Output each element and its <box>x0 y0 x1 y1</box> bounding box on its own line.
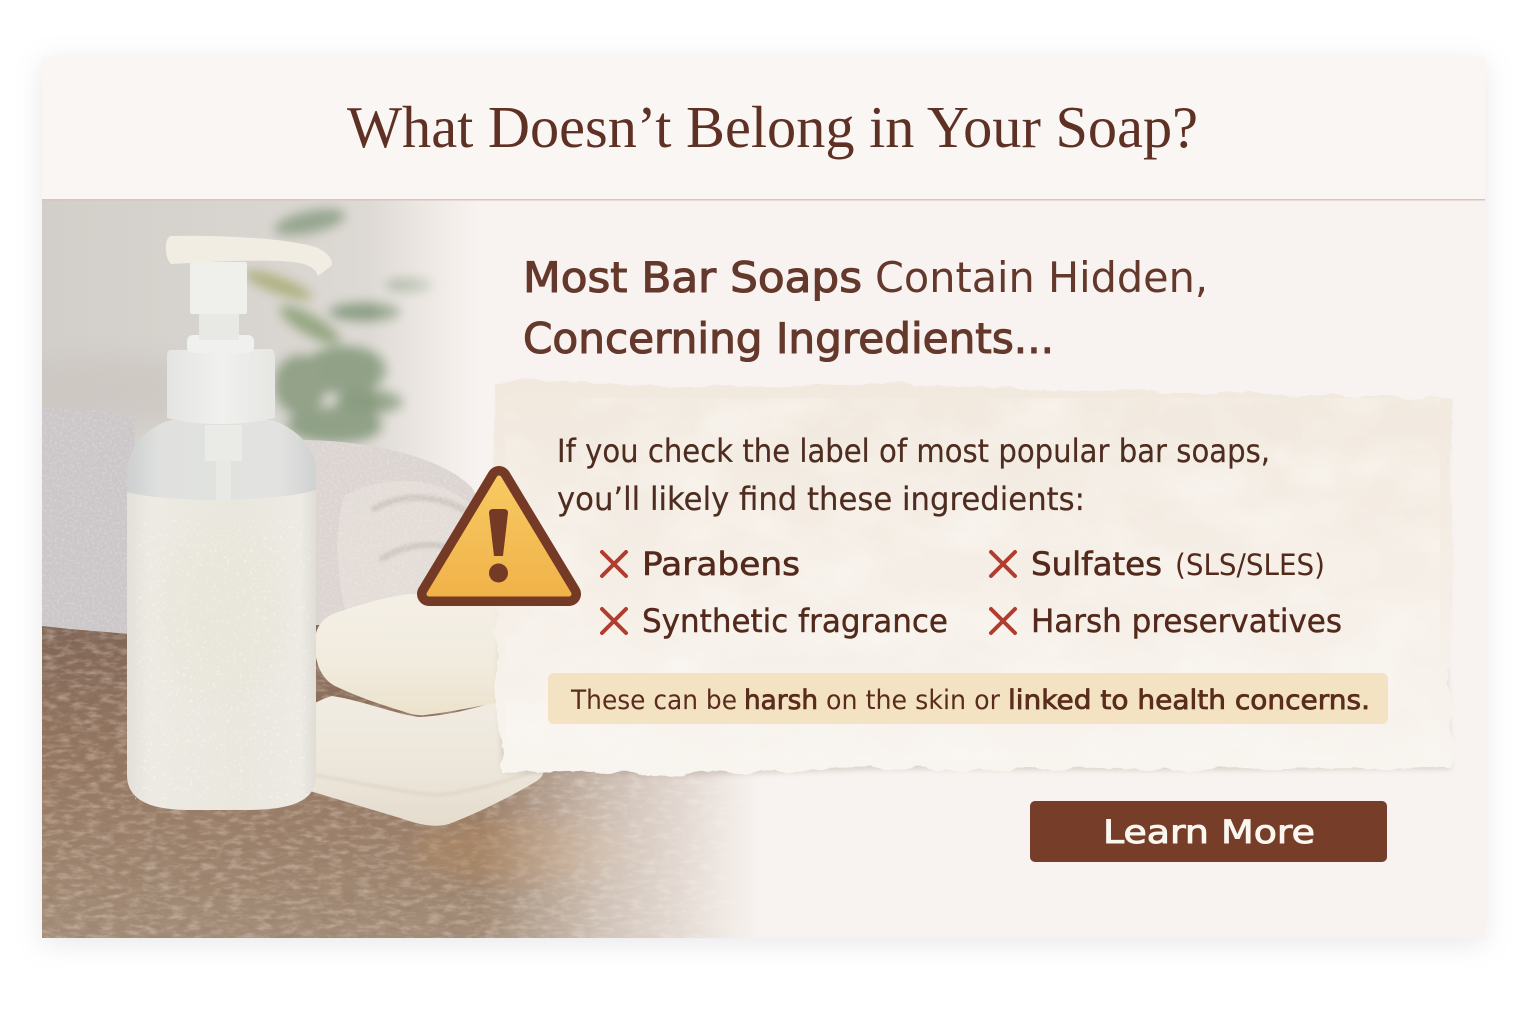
heading: Most Bar Soaps <box>523 253 862 302</box>
heading: Contain Hidden, <box>875 253 1208 302</box>
item: parabens <box>600 550 799 578</box>
photo scene: bottle and soap bars on a table <box>42 200 740 938</box>
item: sulfates: Sulfates <box>1031 545 1162 583</box>
milky liquid <box>127 490 316 810</box>
wall background <box>42 200 443 625</box>
highlight callout: These can be <box>570 685 737 716</box>
item: synthetic fragrance: Synthetic fragrance <box>642 602 948 640</box>
soap bar upper <box>315 594 510 715</box>
item: harsh preservatives: Harsh preservatives <box>1031 602 1342 640</box>
torn paper panel <box>494 380 1454 776</box>
highlight callout: on the skin or <box>826 685 1001 716</box>
highlight callout: harsh <box>744 685 818 716</box>
intro text: you’ll likely find these ingredients: <box>557 480 1085 518</box>
towels <box>42 408 483 634</box>
soap bottle <box>127 236 332 810</box>
heading: Concerning Ingredients... <box>523 314 1054 363</box>
item: sulfates <box>988 550 1323 579</box>
intro text <box>557 432 1270 518</box>
pump collar <box>167 349 275 424</box>
fade of upper scene <box>378 200 480 494</box>
ingredient list <box>602 545 1342 640</box>
intro text: If you check the label of most popular bar soaps, <box>557 432 1270 470</box>
table <box>42 625 740 938</box>
blurred plant <box>241 204 434 443</box>
item: sulfates: (SLS/SLES) <box>1175 548 1325 582</box>
icon: warning triangle <box>429 478 569 594</box>
fade of table <box>494 770 760 938</box>
title: What Doesn’t Belong in Your Soap? <box>347 94 1198 160</box>
pump head with spout <box>166 236 332 276</box>
heading <box>523 253 1208 363</box>
soap bar lower <box>312 696 543 826</box>
pump stem <box>199 314 239 340</box>
dip tube <box>205 425 242 461</box>
item: parabens: Parabens <box>642 545 800 583</box>
bottle upper glass <box>127 420 316 500</box>
header band <box>42 57 1485 199</box>
highlight callout: linked to health concerns. <box>1008 685 1370 716</box>
highlight callout <box>548 673 1388 724</box>
learn more button <box>1030 801 1387 862</box>
learn more button: Learn More <box>1103 813 1315 851</box>
